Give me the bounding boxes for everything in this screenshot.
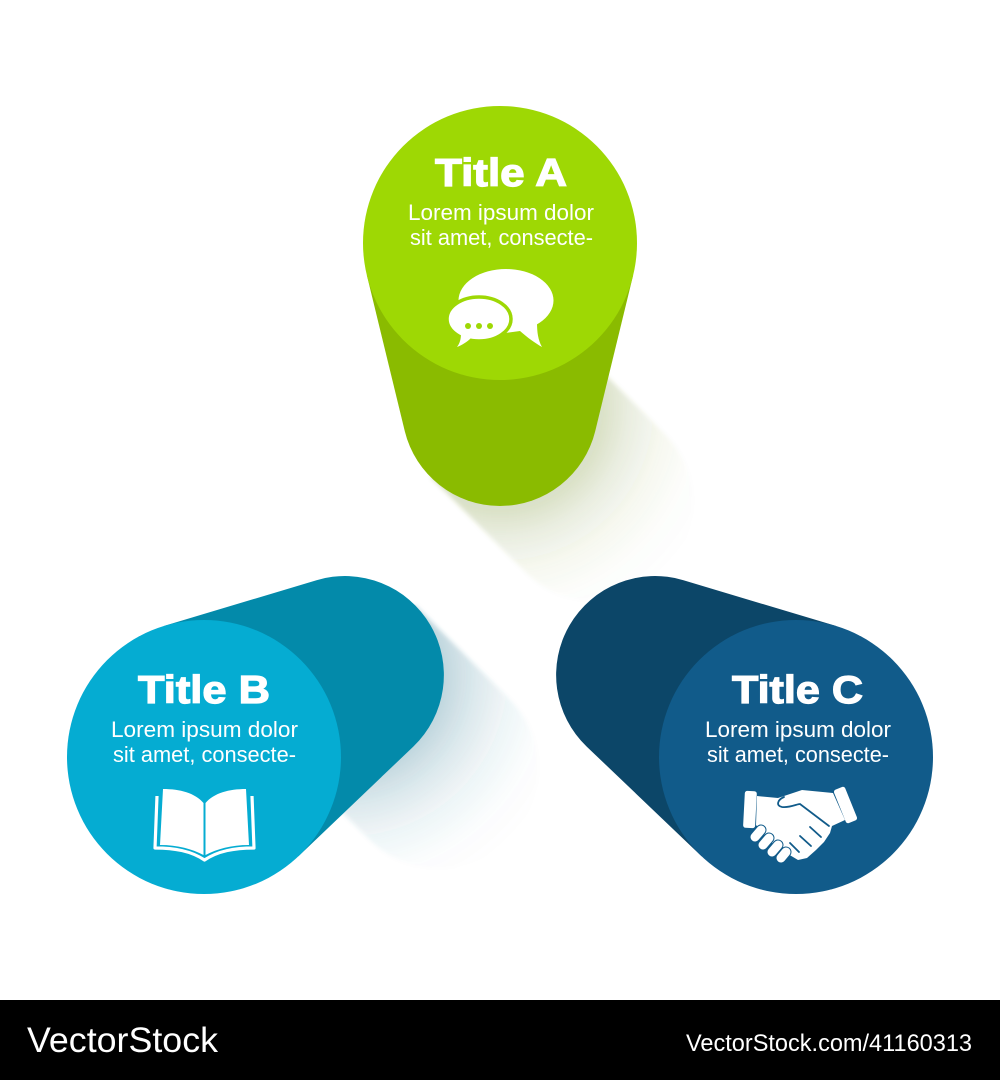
cylinder C top face [659, 620, 933, 894]
heading: Title C: Title C [732, 669, 863, 712]
shadow: cylinder A [431, 339, 693, 601]
heading: Title A: Title A [435, 152, 567, 195]
text block B: sit amet, consecte- [113, 742, 296, 767]
icon: handshake [743, 786, 858, 860]
cylinder C side [556, 576, 878, 862]
panel: cylinder A [363, 106, 637, 506]
text block B: Lorem ipsum dolor [111, 717, 298, 742]
cylinder B side [122, 576, 444, 862]
heading: Title B: Title B [138, 669, 270, 712]
shadow: cylinder B [275, 605, 538, 868]
footer bar [0, 1000, 1000, 1080]
text block C: sit amet, consecte- [707, 742, 889, 767]
cylinder A side [367, 171, 633, 506]
icon: speech bubbles [447, 269, 554, 347]
text block A: sit amet, consecte- [410, 225, 593, 250]
footer brand: VectorStock [27, 1021, 219, 1060]
panel: cylinder C [556, 576, 933, 894]
text block A [408, 200, 594, 250]
footer image id: VectorStock.com/41160313 [686, 1030, 972, 1057]
text block B [111, 717, 298, 767]
text block A: Lorem ipsum dolor [408, 200, 594, 225]
text block C [705, 717, 891, 767]
text block C: Lorem ipsum dolor [705, 717, 891, 742]
cylinder A top face [363, 106, 637, 380]
panel: cylinder B [67, 576, 444, 894]
icon: open book [155, 789, 254, 860]
cylinder B top face [67, 620, 341, 894]
